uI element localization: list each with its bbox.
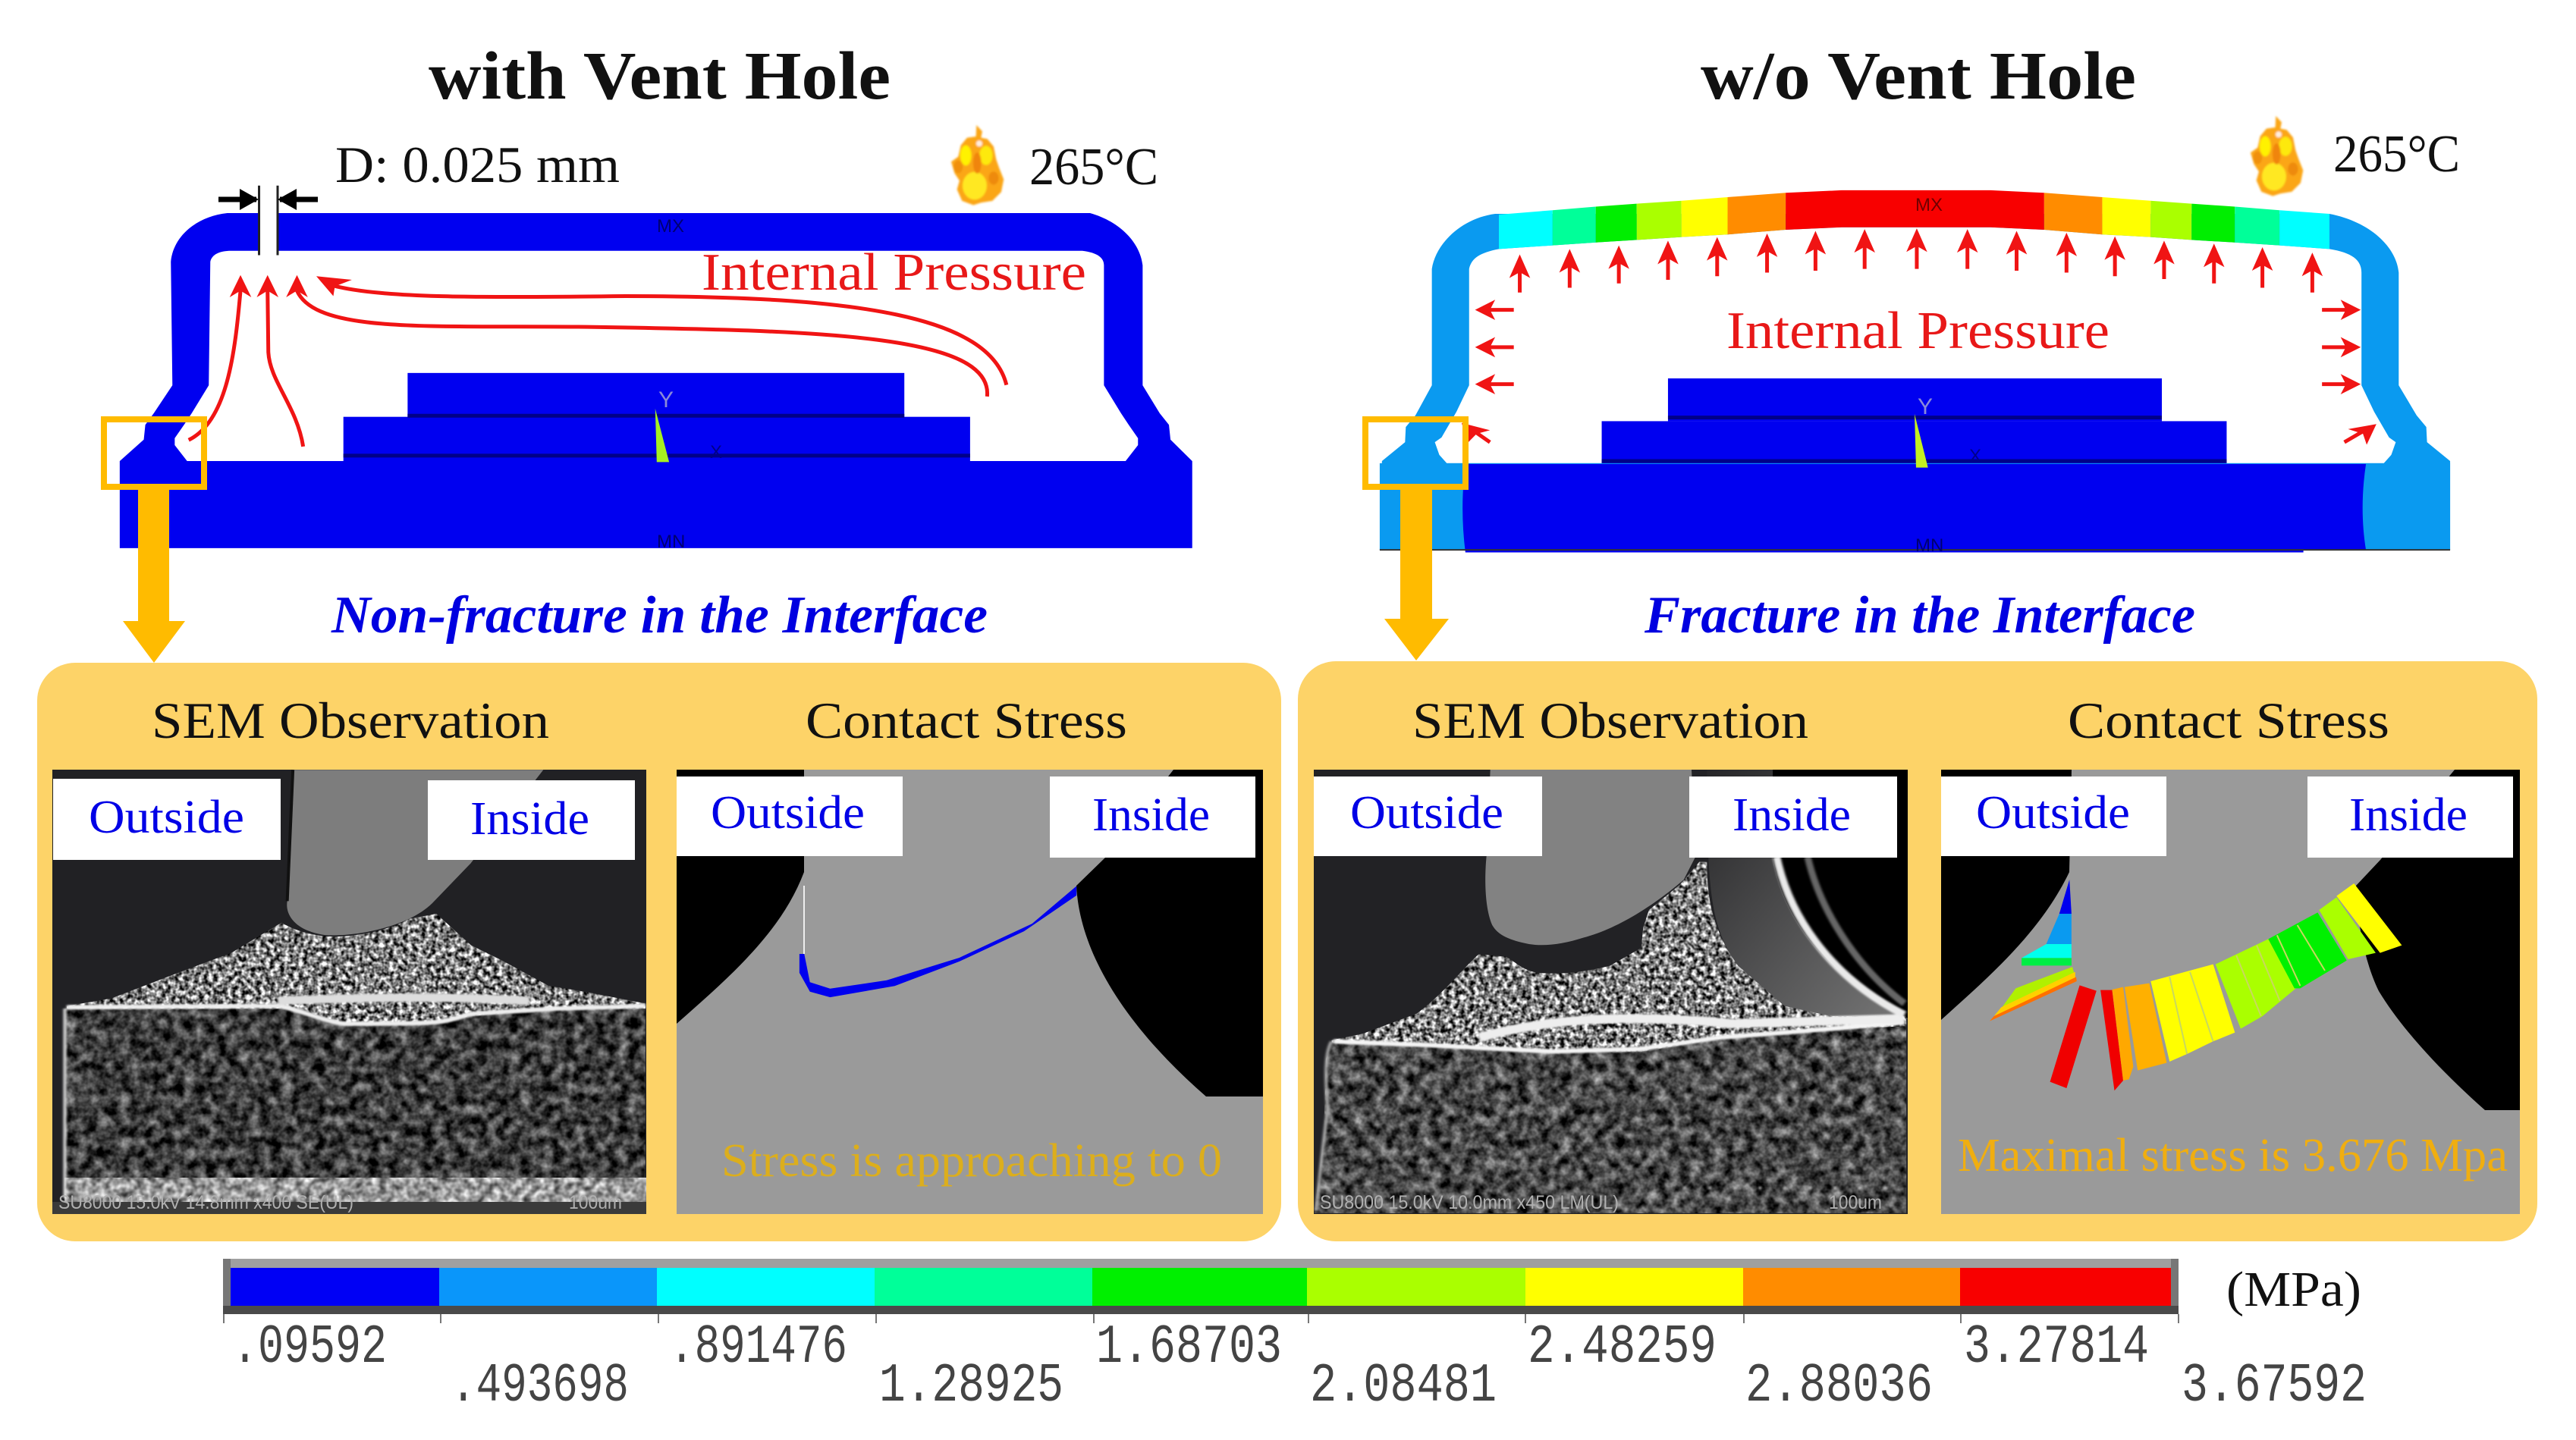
FEA axis and extrema marks: MN — [657, 532, 685, 552]
callout box — [1365, 419, 1465, 487]
temperature: 265°C — [2333, 125, 2460, 184]
label box: outside — [53, 779, 281, 860]
heading: Contact Stress: Contact Stress — [806, 692, 1127, 749]
SEM micrograph, non-fractured: 100um — [569, 1192, 622, 1213]
label box: outside — [677, 776, 903, 856]
panel background — [37, 663, 1281, 1241]
FEA axis and extrema marks: X — [710, 442, 722, 463]
FEA axis and extrema marks: Y — [1918, 394, 1933, 419]
contact stress plot, near zero — [677, 770, 1263, 1214]
scale values: 1.28925 — [879, 1355, 1063, 1417]
FEA axis and extrema marks: X — [1969, 446, 1981, 466]
scale values: 3.27814 — [1964, 1316, 2149, 1379]
label box: inside — [1689, 776, 1897, 858]
scale values: 1.68703 — [1096, 1316, 1282, 1379]
stress fan bars — [1990, 880, 2402, 1090]
label: inside: Inside — [2349, 789, 2468, 841]
scale values: 2.08481 — [1310, 1355, 1497, 1417]
panel: with vent hole results — [37, 663, 1281, 1241]
label: inside: Inside — [1092, 789, 1210, 841]
heading: SEM Observation: SEM Observation — [152, 692, 549, 749]
result caption: Non-fracture in the Interface — [331, 586, 988, 645]
SEM micrograph, fractured: 100um — [1829, 1192, 1882, 1213]
dimension arrows — [218, 189, 318, 210]
diagram: package without vent hole — [1365, 116, 2460, 660]
dimension label: D: 0.025 mm — [335, 136, 620, 193]
panel: without vent hole results — [1298, 661, 2537, 1241]
label box: inside — [1050, 776, 1255, 858]
label: outside: Outside — [711, 787, 865, 839]
icon: flame — [951, 125, 1004, 205]
SEM micrograph, fractured — [1314, 770, 1908, 1214]
arrow down to panel — [123, 490, 185, 663]
label: outside: Outside — [89, 792, 244, 843]
scale values: .891476 — [669, 1316, 847, 1379]
label box: outside — [1941, 776, 2166, 856]
FEA axis and extrema marks: Y — [658, 387, 674, 413]
FEA model cross-section, vented — [120, 186, 1192, 548]
FEA axis and extrema marks — [657, 216, 722, 552]
label: inside: Inside — [1733, 789, 1851, 841]
SEM micrograph, non-fractured: SU8000 15.0kV 14.8mm x400 SE(UL) — [58, 1192, 353, 1213]
title: with Vent Hole: with Vent Hole — [429, 39, 891, 114]
title: w/o Vent Hole: w/o Vent Hole — [1701, 39, 2136, 114]
heading: Contact Stress: Contact Stress — [2068, 692, 2389, 749]
FEA axis and extrema marks: MX — [657, 216, 684, 237]
pressure flow arrows — [189, 275, 1007, 447]
unit: (MPa) — [2226, 1262, 2361, 1317]
FEA model cross-section, deformed — [1380, 190, 2450, 552]
SEM micrograph, non-fractured — [52, 770, 646, 1214]
FEA axis and extrema marks — [1915, 195, 1981, 556]
label: internal pressure: Internal Pressure — [1726, 302, 2109, 360]
label box: inside — [428, 780, 635, 860]
label: outside: Outside — [1976, 787, 2130, 839]
FEA axis and extrema marks: MX — [1915, 195, 1943, 215]
temperature: 265°C — [1029, 138, 1158, 196]
scale values: .09592 — [232, 1316, 387, 1379]
colour bar — [223, 1259, 2179, 1323]
label: internal pressure: Internal Pressure — [702, 243, 1086, 302]
icon: flame — [2251, 116, 2303, 196]
stress note: Maximal stress is 3.676 Mpa — [1958, 1130, 2508, 1181]
label: outside: Outside — [1350, 787, 1503, 839]
scale values: 3.67592 — [2182, 1355, 2367, 1417]
legend: stress colour scale — [223, 1259, 2367, 1417]
panel background — [1298, 661, 2537, 1241]
result caption: Fracture in the Interface — [1644, 586, 2195, 645]
pressure arrows on lid and walls — [1462, 228, 2377, 444]
vent hole — [259, 186, 278, 255]
contact stress plot, peak stress — [1941, 770, 2520, 1214]
FEA axis and extrema marks: MN — [1915, 535, 1943, 556]
label: inside: Inside — [470, 793, 589, 845]
label box: outside — [1314, 776, 1542, 856]
scale values — [232, 1316, 2367, 1417]
diagram: package with vent hole — [104, 125, 1192, 663]
scale values: 2.88036 — [1745, 1355, 1933, 1417]
stress note: Stress is approaching to 0 — [721, 1135, 1222, 1187]
label box: inside — [2307, 776, 2513, 858]
scale values: 2.48259 — [1528, 1316, 1717, 1379]
SEM micrograph, fractured: SU8000 15.0kV 10.0mm x450 LM(UL) — [1320, 1192, 1619, 1213]
callout box — [104, 419, 204, 487]
scale values: .493698 — [451, 1355, 629, 1417]
arrow down to panel — [1384, 490, 1449, 660]
heading: SEM Observation: SEM Observation — [1412, 692, 1808, 749]
